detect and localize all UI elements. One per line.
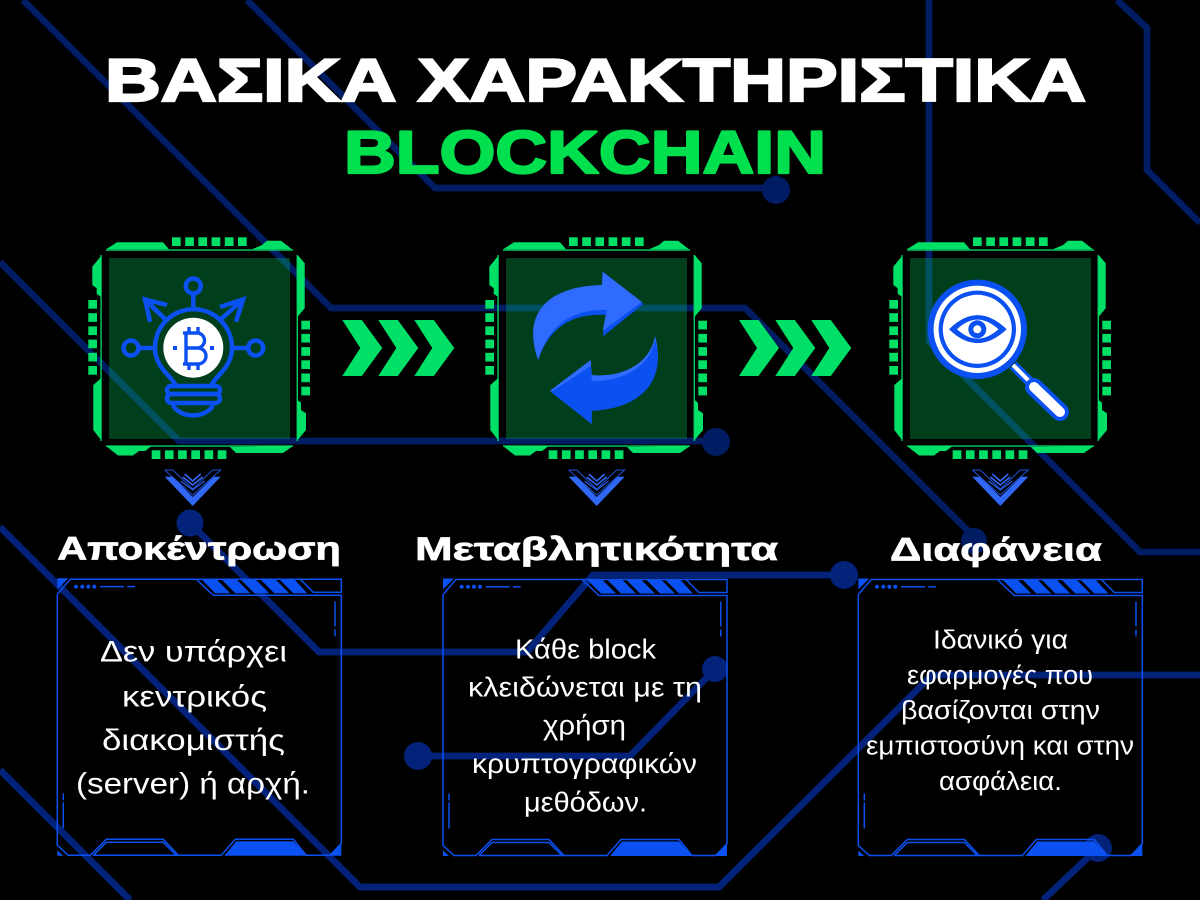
title line 1: ΒΑΣΙΚΑ ΧΑΡΑΚΤΗΡΙΣΤΙΚΑ [105, 47, 1086, 114]
text block: card 1: Δεν υπάρχει [100, 636, 287, 668]
panel: card 3 frame [858, 578, 1142, 856]
text block: card 1: (server) ή αρχή. [76, 768, 310, 800]
text block: card 2: χρήση [543, 710, 626, 740]
text block: card 3: ασφάλεια. [939, 768, 1062, 796]
icon: magnifier with eye [928, 280, 1060, 412]
text block: card 3: εφαρμογές που [907, 662, 1093, 690]
text block: card 3: Ιδανικό για [933, 626, 1068, 654]
text block: card 2: μεθόδων. [524, 786, 647, 818]
text block: card 1: διακομιστής [102, 724, 285, 757]
text block: card 3 [866, 626, 1134, 796]
panel: transparency icon tile [889, 237, 1111, 459]
heading: decentralization: Αποκέντρωση [57, 530, 341, 566]
panel: mutability icon tile [485, 237, 707, 459]
text block: card 2: κλειδώνεται με τη [468, 672, 702, 702]
icon: sync arrows [533, 272, 658, 424]
title [105, 47, 1086, 186]
text block: card 1 [76, 636, 310, 800]
text block: card 1: κεντρικός [122, 680, 267, 714]
text block: card 2: Κάθε block [515, 634, 656, 664]
icon: bitcoin light bulb [124, 278, 263, 415]
arrow: chevrons 1 [342, 320, 454, 376]
icon: down chevron 1 [165, 470, 221, 506]
panel: card 2 frame [443, 578, 727, 856]
icon: down chevron 2 [569, 470, 625, 506]
heading: transparency: Διαφάνεια [890, 532, 1102, 568]
text block: card 3: βασίζονται στην [901, 697, 1100, 725]
text block: card 3: εμπιστοσύνη και στην [866, 732, 1134, 760]
heading: mutability: Μεταβλητικότητα [415, 531, 778, 567]
title line 2: BLOCKCHAIN [344, 119, 826, 186]
panel: card 1 frame [57, 578, 341, 856]
text block: card 2: κρυπτογραφικών [472, 748, 697, 779]
arrow: chevrons 2 [739, 320, 851, 376]
icon: down chevron 3 [972, 470, 1028, 506]
panel: decentralization icon tile [88, 237, 310, 459]
text block: card 2 [468, 634, 702, 818]
